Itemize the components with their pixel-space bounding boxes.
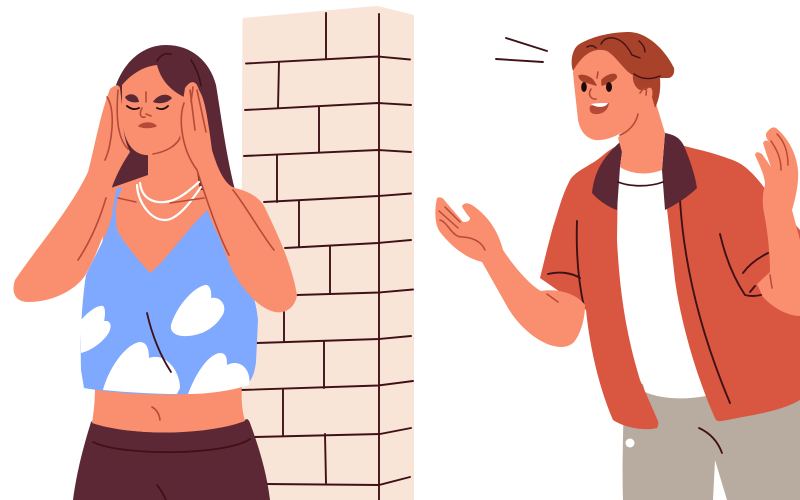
woman: right arm and hand: [179, 82, 297, 312]
woman: facial features: [125, 54, 201, 154]
man: neck and face: [573, 44, 665, 173]
man: left arm and open hand: [435, 197, 585, 347]
woman: collarbone lines: [118, 198, 204, 203]
woman: left arm and hand: [14, 85, 130, 302]
brick wall: [240, 6, 414, 500]
woman covering her ears: [14, 45, 297, 500]
woman: face: [122, 65, 190, 155]
man: hair: [572, 32, 674, 108]
shouting motion lines: [496, 38, 547, 62]
man: raised right arm and hand: [755, 127, 800, 316]
woman: blue cloud top: [81, 187, 258, 420]
man: red jacket: [540, 145, 800, 429]
man: dark collar: [592, 133, 697, 210]
woman: waist: [92, 385, 245, 433]
woman: torso and neck: [100, 130, 245, 290]
woman: hair: [108, 45, 235, 200]
woman: trousers: [73, 419, 270, 500]
man: white shirt: [615, 160, 706, 398]
man shouting: [435, 32, 800, 500]
man: trousers: [623, 375, 800, 500]
man: facial features: [579, 72, 646, 135]
woman: necklace: [137, 182, 201, 220]
man: shirt neckline: [618, 182, 663, 186]
